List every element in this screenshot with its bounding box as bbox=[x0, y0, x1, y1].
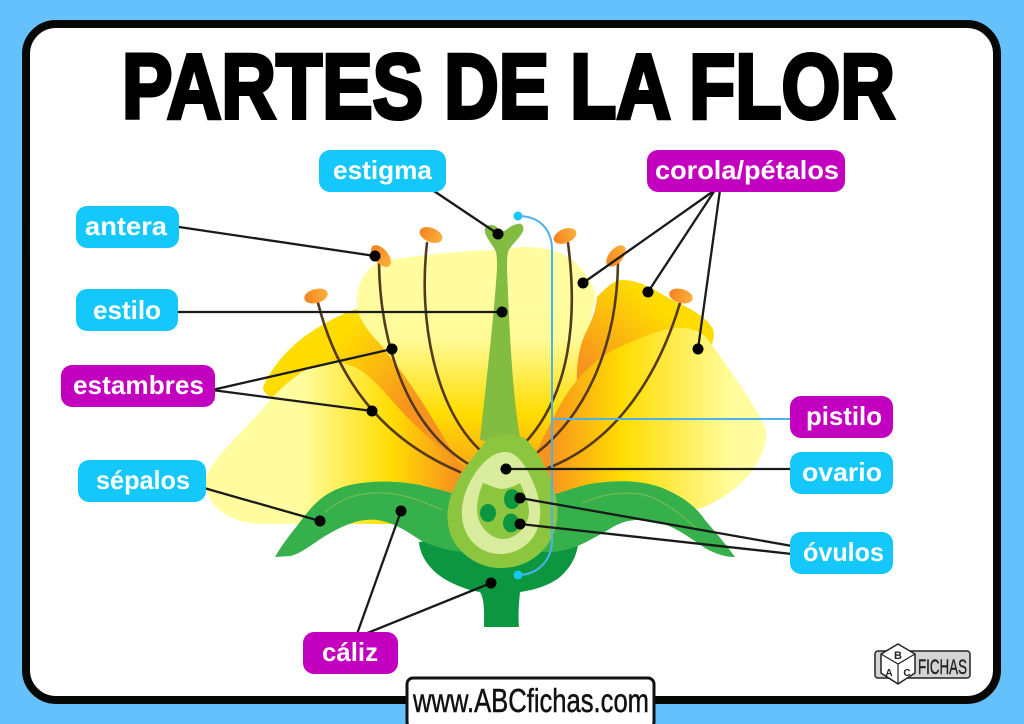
label: óvulos bbox=[790, 532, 893, 574]
left middle petal bbox=[263, 309, 462, 470]
label: estilo bbox=[76, 289, 178, 331]
pistil bracket bbox=[514, 212, 790, 580]
label: sépalos bbox=[78, 460, 206, 502]
label: ovario bbox=[790, 452, 893, 494]
stem and receptacle bbox=[419, 530, 578, 627]
label: óvulos: óvulos bbox=[803, 537, 884, 567]
logo: ABC fichas: C bbox=[903, 668, 911, 679]
label: pistilo bbox=[790, 396, 893, 438]
label: sépalos: sépalos bbox=[96, 465, 190, 495]
front right petal bbox=[530, 328, 766, 510]
front left petal bbox=[205, 363, 470, 524]
stamens: anthers bbox=[303, 224, 694, 306]
right middle petal bbox=[577, 280, 714, 400]
logo: ABC fichas: A bbox=[885, 668, 893, 679]
label: pistilo: pistilo bbox=[806, 401, 882, 431]
ovules bbox=[480, 489, 520, 532]
label: estigma bbox=[319, 150, 446, 192]
label: cáliz: cáliz bbox=[322, 637, 378, 667]
website box: www.ABCfichas.com bbox=[412, 682, 649, 719]
label: estambres: estambres bbox=[73, 370, 204, 400]
sepal veins bbox=[325, 493, 442, 512]
ovary inner wall bbox=[462, 452, 540, 554]
label: estigma: estigma bbox=[333, 155, 433, 185]
flower illustration bbox=[205, 224, 766, 627]
label: estambres bbox=[61, 365, 215, 407]
label: corola/pétalos: corola/pétalos bbox=[655, 155, 839, 185]
label: corola/pétalos bbox=[647, 150, 845, 192]
label: antera: antera bbox=[85, 211, 168, 241]
leader lines and dots bbox=[178, 185, 792, 634]
ovary outer bbox=[447, 435, 557, 568]
logo: ABC fichas: FICHAS bbox=[918, 656, 967, 679]
logo: ABC fichas bbox=[875, 644, 970, 684]
stamens: filaments bbox=[318, 243, 680, 472]
left sepal bbox=[275, 482, 470, 557]
pistil: stigma and style bbox=[480, 224, 523, 448]
website box bbox=[407, 678, 654, 724]
ovary chamber bbox=[477, 483, 529, 539]
label: antera bbox=[76, 206, 179, 248]
label: ovario: ovario bbox=[802, 457, 882, 487]
label: estilo: estilo bbox=[93, 295, 161, 325]
label: cáliz bbox=[303, 632, 398, 674]
right sepal bbox=[530, 481, 735, 557]
logo: ABC fichas: B bbox=[894, 650, 902, 662]
back petal bbox=[357, 247, 595, 490]
